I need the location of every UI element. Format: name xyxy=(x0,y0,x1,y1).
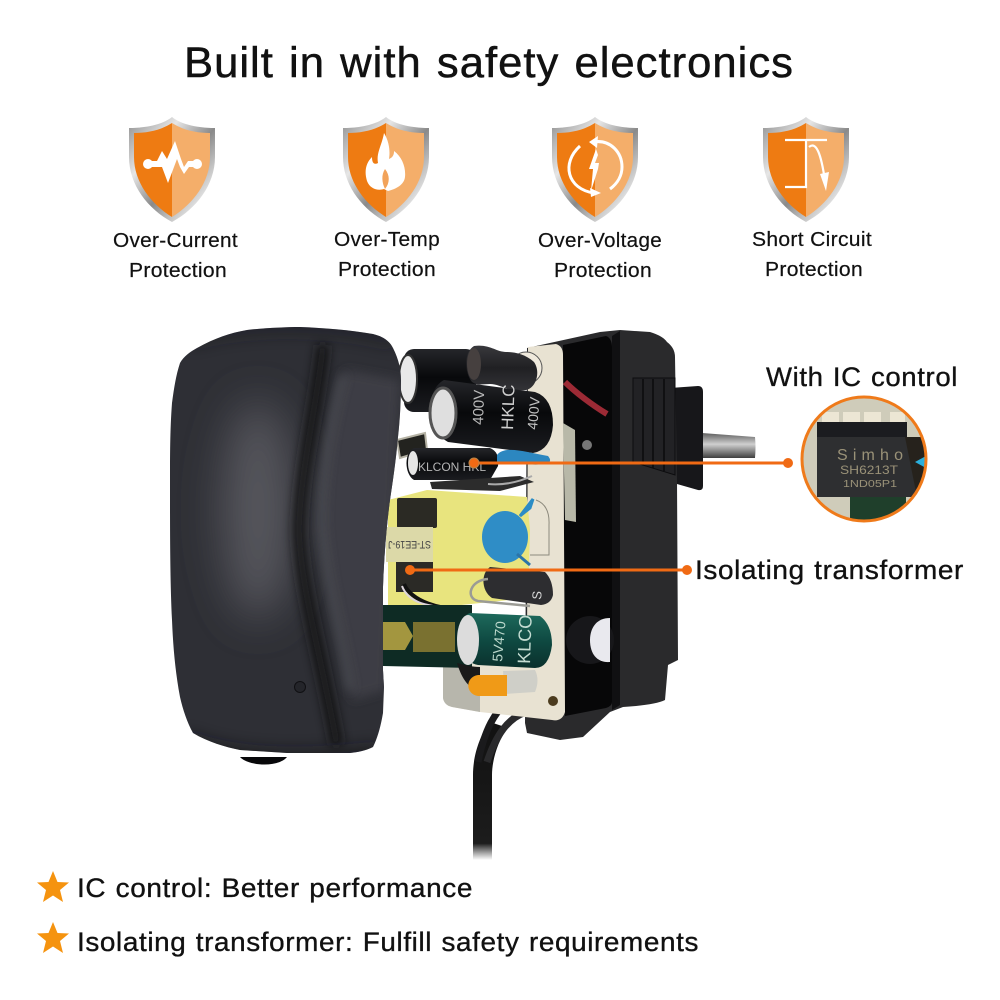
plug and metal pin xyxy=(670,386,756,490)
label: over-voltage protection xyxy=(538,230,662,282)
inset: IC chip magnified: Simho xyxy=(837,447,903,464)
capacitor KLCON: KLCON HKL xyxy=(418,460,486,474)
diode xyxy=(471,567,553,606)
icon: over-temperature shield xyxy=(343,117,429,222)
dark green component xyxy=(383,605,480,690)
icon: over-current shield xyxy=(129,117,215,222)
large capacitor 400V: HKLC xyxy=(498,384,519,430)
green capacitor: KLCO xyxy=(514,614,536,664)
feature text: IC control: IC control: Better performance xyxy=(77,873,473,903)
title: Built in with safety electronics xyxy=(184,39,794,87)
label: over-temp protection: Over-Temp xyxy=(334,229,440,251)
label: short circuit protection: Short Circuit xyxy=(752,229,872,251)
large capacitor 400V: 400V xyxy=(470,390,488,425)
label: over-current protection xyxy=(113,230,238,282)
blue film capacitor xyxy=(497,450,550,465)
circuit board xyxy=(443,344,576,720)
orange indicator diode xyxy=(468,670,538,696)
rear housing xyxy=(525,330,678,740)
power adapter illustration xyxy=(160,320,756,860)
icon: star bullet two xyxy=(37,922,69,953)
blue ceramic capacitor xyxy=(482,499,533,565)
inductor xyxy=(466,346,542,390)
label: over-temp protection: Protection xyxy=(338,259,436,281)
yellow transformer: ST-EE19-J xyxy=(388,538,431,550)
feature text: isolating transformer: Isolating transformer: Fulfill safety requirements xyxy=(77,927,699,957)
icon: over-voltage shield xyxy=(552,117,638,222)
front cover xyxy=(160,320,410,765)
capacitor KLCON xyxy=(397,433,534,491)
green capacitor xyxy=(457,613,552,668)
inset: IC chip magnified: 1ND05P1 xyxy=(843,479,898,490)
label: over-temp protection xyxy=(334,229,440,281)
icon: short-circuit shield xyxy=(763,117,849,222)
heading: isolating transformer: Isolating transformer xyxy=(695,555,964,585)
label: short circuit protection xyxy=(752,229,872,281)
label: over-voltage protection: Over-Voltage xyxy=(538,230,662,252)
inset: IC chip magnified xyxy=(801,396,929,525)
large capacitor 400V: 400V xyxy=(524,396,543,430)
diode: S xyxy=(529,590,545,600)
callout: transformer line xyxy=(405,565,692,575)
large capacitor 400V xyxy=(430,380,553,453)
label: over-current protection: Protection xyxy=(129,260,227,282)
output cable xyxy=(473,698,526,860)
small capacitor top xyxy=(399,349,476,412)
label: short circuit protection: Protection xyxy=(765,259,863,281)
green capacitor: 5V470 xyxy=(489,620,509,662)
icon: star bullet one xyxy=(37,871,69,902)
yellow transformer xyxy=(386,490,530,609)
callout: IC control line xyxy=(469,458,793,468)
heading: with IC control: With IC control xyxy=(766,362,958,392)
inset: IC chip magnified: SH6213T xyxy=(840,463,899,477)
label: over-current protection: Over-Current xyxy=(113,230,238,252)
label: over-voltage protection: Protection xyxy=(554,260,652,282)
